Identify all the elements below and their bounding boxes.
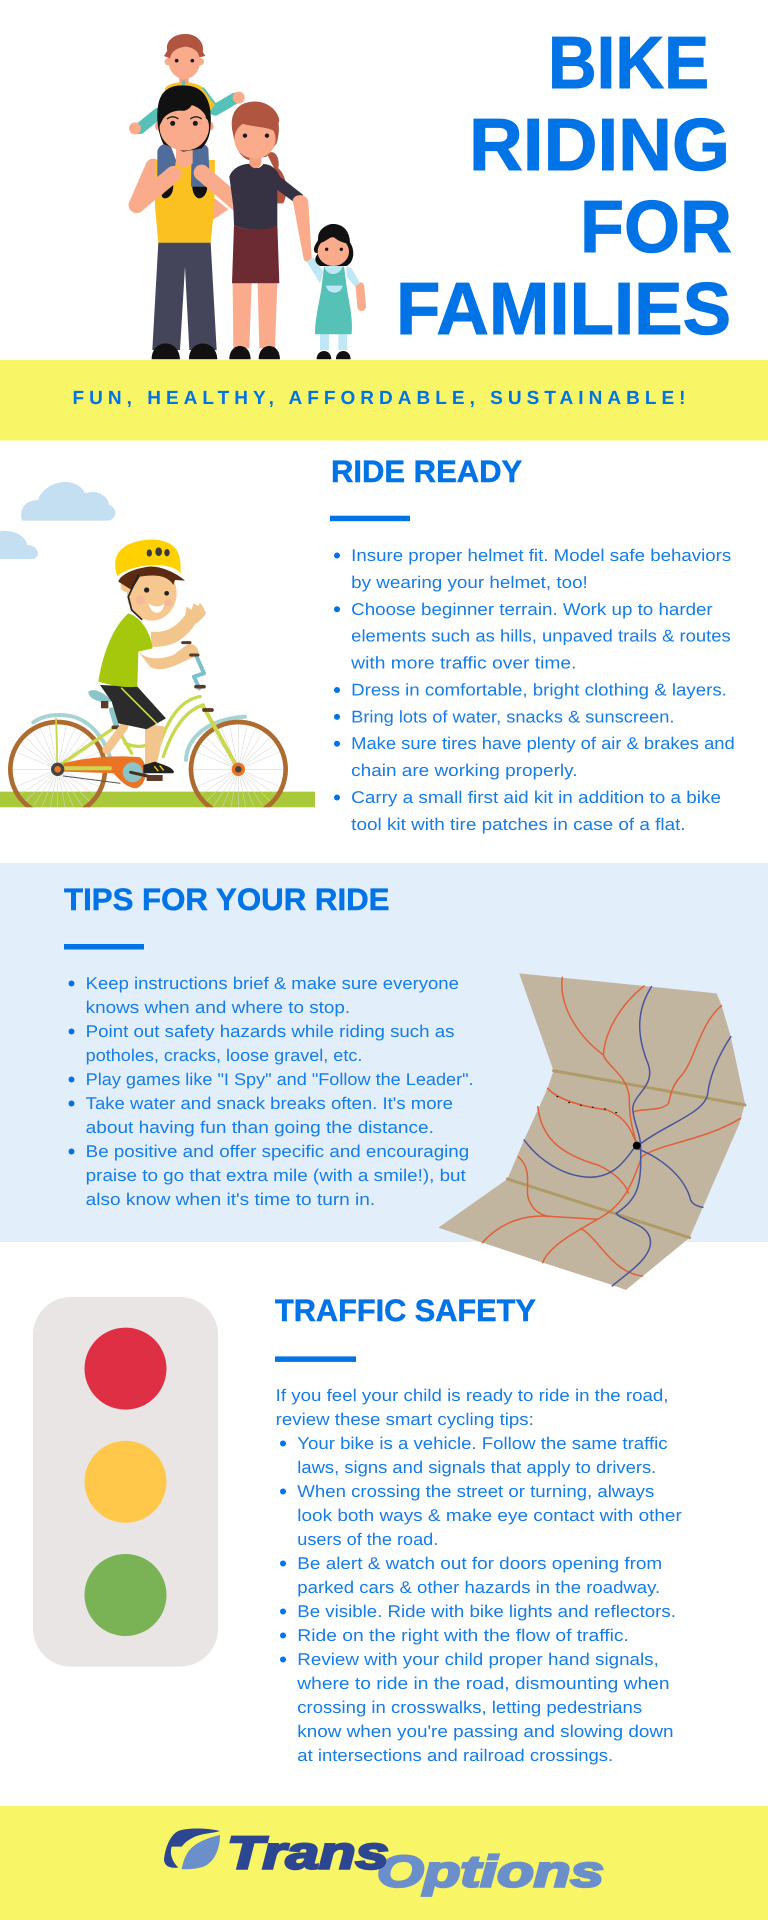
panel: tips background [0,863,768,1242]
list: traffic safety: laws, signs and signals that apply to drivers. [297,1458,656,1477]
list: traffic safety [276,1386,682,1765]
list: traffic safety: If you feel your child is ready to ride in the road, [276,1386,668,1405]
list: traffic safety: where to ride in the road, dismounting when [296,1674,670,1693]
list: tips: Take water and snack breaks often. It's more [86,1094,453,1113]
icon: clouds [0,482,115,559]
figure: father with child on shoulders [129,34,245,359]
heading: tips for your ride: TIPS FOR YOUR RIDE [64,882,390,917]
title: RIDING [469,103,730,186]
list: tips [68,974,474,1209]
list: tips: potholes, cracks, loose gravel, etc. [86,1046,362,1065]
illustration: boy on bicycle [0,539,315,817]
list: ride ready: Choose beginner terrain. Work up to harder [351,600,713,619]
list: traffic safety: crossing in crosswalks, letting pedestrians [297,1698,642,1717]
list: tips: also know when it's time to turn in. [86,1190,375,1209]
list: traffic safety: review these smart cycling tips: [276,1410,534,1429]
list: ride ready: with more traffic over time. [350,654,576,673]
list: traffic safety: Review with your child proper hand signals, [297,1650,659,1669]
list: traffic safety: users of the road. [297,1530,438,1549]
footer band [0,1806,768,1920]
logo: TransOptions: Trans [227,1826,389,1878]
list: ride ready: Dress in comfortable, bright clothing & layers. [351,680,727,700]
list: ride ready [334,546,735,834]
list: traffic safety: Your bike is a vehicle. Follow the same traffic [297,1434,668,1453]
figure: girl [307,224,362,359]
list: traffic safety: at intersections and railroad crossings. [297,1746,613,1765]
icon: bicycle [10,657,286,817]
list: ride ready: chain are working properly. [351,761,578,780]
list: tips: Keep instructions brief & make sure everyone [86,974,459,993]
list: traffic safety: Ride on the right with the flow of traffic. [297,1626,629,1645]
list: ride ready: elements such as hills, unpaved trails & routes [351,627,731,646]
list: tips: Point out safety hazards while riding such as [86,1022,454,1041]
list: tips: praise to go that extra mile (with a smile!), but [86,1166,466,1185]
figure: boy [98,539,206,773]
heading: ride ready: RIDE READY [331,454,523,489]
list: traffic safety: Be visible. Ride with bike lights and reflectors. [297,1602,676,1621]
heading: traffic safety: TRAFFIC SAFETY [275,1293,536,1328]
list: tips: Play games like "I Spy" and "Follow the Leader". [86,1070,474,1089]
list: traffic safety: When crossing the street or turning, always [297,1482,654,1501]
list: ride ready: by wearing your helmet, too! [351,573,588,592]
list: tips: Be positive and offer specific and encouraging [86,1142,469,1161]
title: BIKE [548,21,709,104]
title [396,21,732,350]
figure: mother [229,102,312,359]
icon: logo leaf [164,1828,220,1869]
list: traffic safety: know when you're passing and slowing down [297,1722,674,1741]
list: traffic safety: look both ways & make eye contact with other [297,1506,682,1525]
tagline band: FUN, HEALTHY, AFFORDABLE, SUSTAINABLE! [72,388,686,409]
title: FAMILIES [396,267,731,350]
list: traffic safety: Be alert & watch out for doors opening from [297,1554,662,1573]
illustration: folded trail map [438,973,745,1290]
list: ride ready: tool kit with tire patches in case of a flat. [351,815,686,834]
list: tips: knows when and where to stop. [86,998,350,1017]
illustration: family [129,34,362,359]
list: traffic safety: parked cars & other hazards in the roadway. [297,1578,660,1597]
icon: traffic light [33,1297,218,1667]
title: FOR [580,185,732,268]
logo: TransOptions [164,1826,604,1897]
list: tips: about having fun than going the distance. [86,1118,434,1137]
list: ride ready: Make sure tires have plenty of air & brakes and [351,734,735,753]
list: ride ready: Carry a small first aid kit in addition to a bike [351,788,721,807]
tagline band [0,360,768,440]
list: ride ready: Bring lots of water, snacks & sunscreen. [351,707,674,726]
list: ride ready: Insure proper helmet fit. Model safe behaviors [351,546,731,565]
logo: TransOptions: Options [377,1848,604,1897]
